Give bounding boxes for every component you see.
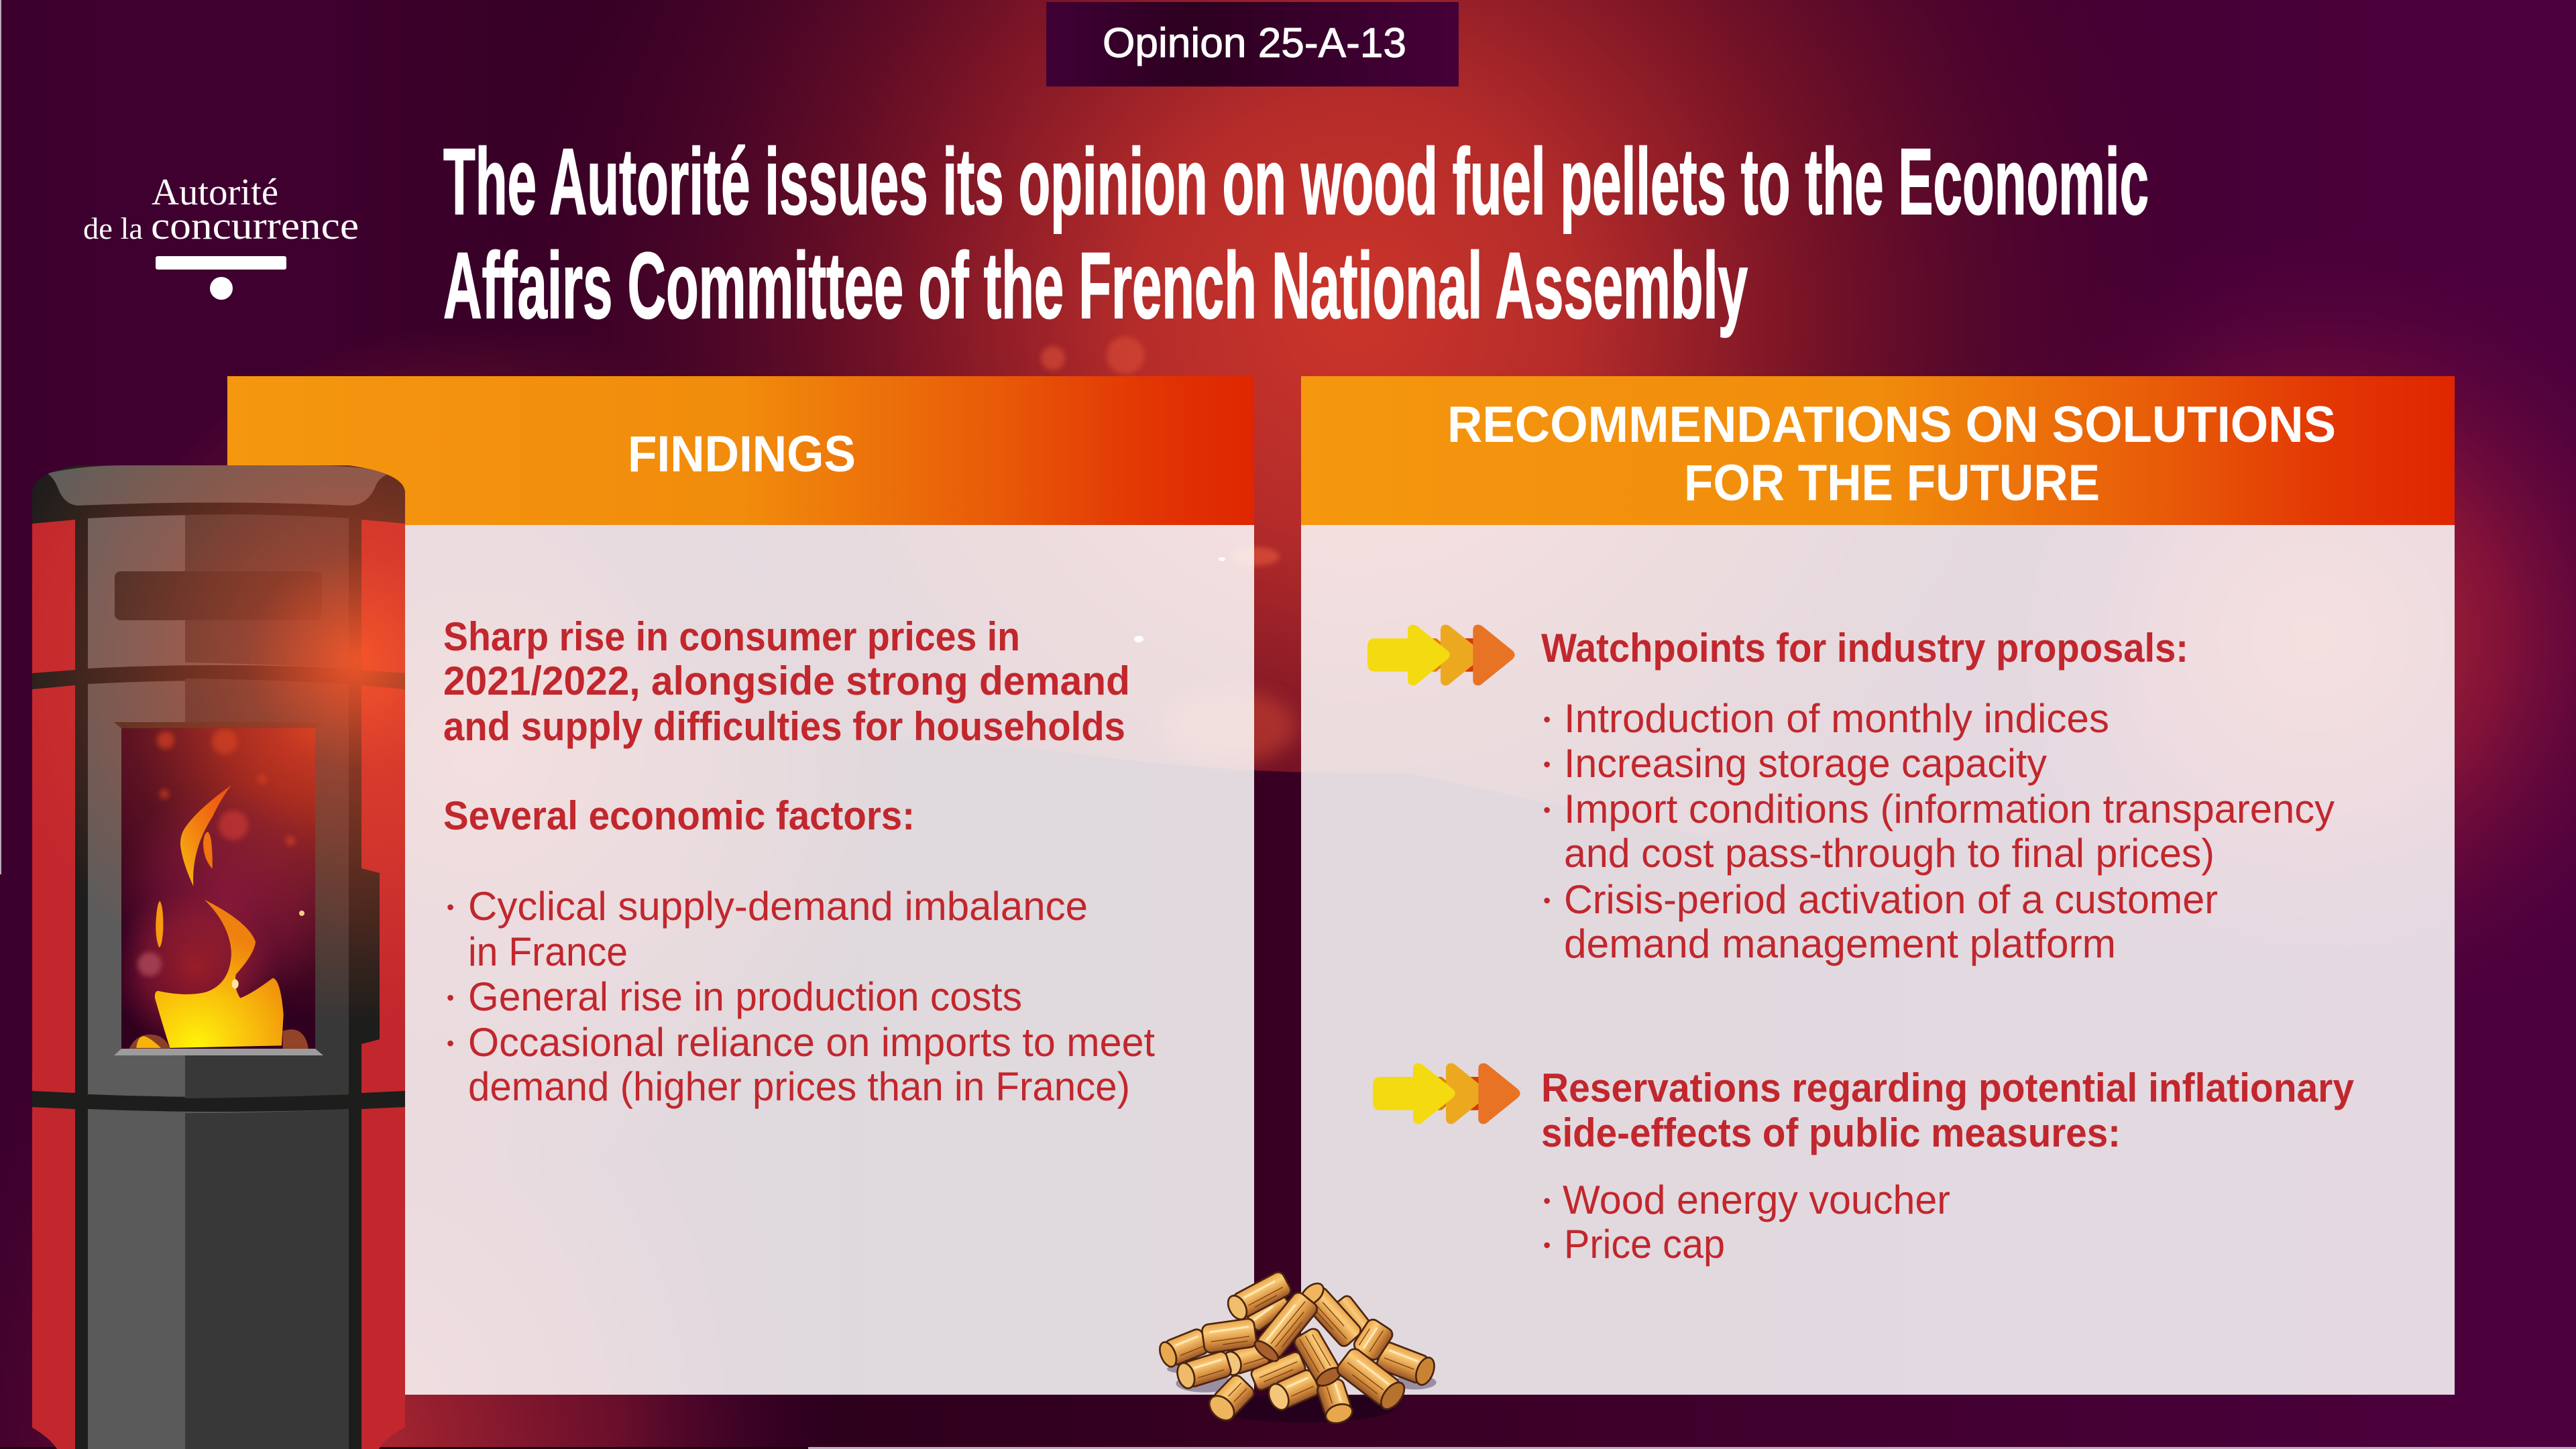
watchpoints list: demand management platform [1564,921,2116,966]
reservations list: • [1543,1189,1551,1213]
firebox [114,722,323,1055]
stove illustration [32,465,405,1449]
findings body [227,525,1254,1395]
pellet pile [1157,1270,1438,1426]
economic factors list: General rise in production costs [468,974,1022,1019]
reservations heading: Reservations regarding potential inflationary [1541,1065,2355,1110]
opinion tag: Opinion 25-A-13 [1103,20,1406,66]
economic factors list: in France [468,929,628,974]
icon: arrows watchpoints [1367,625,1515,685]
embers [137,729,304,976]
findings lead text: and supply difficulties for households [443,704,1125,749]
reservations list: Wood energy voucher [1563,1177,1950,1222]
recommendations header [1301,376,2455,525]
recommendations heading: RECOMMENDATIONS ON SOLUTIONS [1447,396,2336,453]
economic factors list: Cyclical supply-demand imbalance [468,884,1088,929]
recommendations heading [1447,396,2336,512]
recommendations heading: FOR THE FUTURE [1684,455,2100,512]
opinion tag [1046,2,1459,86]
panel: recommendations [1301,376,2455,1395]
logo: Autorité de la concurrence [83,172,359,300]
watchpoints list: Introduction of monthly indices [1564,696,2109,741]
economic factors list: • [447,986,454,1010]
pellet shadows [1167,1365,1437,1423]
icon: arrows reservations [1373,1063,1520,1124]
recommendations body [1301,525,2455,1395]
economic factors list: • [447,1031,454,1055]
reservations heading: side-effects of public measures: [1541,1110,2121,1155]
panel: findings [227,376,1254,1395]
logo: Autorité de la concurrence: Autorité [152,172,278,213]
findings header [227,376,1254,525]
watchpoints list: Import conditions (information transparency [1564,787,2335,831]
reservations heading [1541,1065,2355,1155]
stove shell panels [32,465,405,1449]
reservations list: Price cap [1564,1222,1725,1267]
findings heading: FINDINGS [628,426,856,483]
reservations list [1543,1177,1950,1267]
glow over stove [32,465,405,1003]
watchpoints list: • [1543,707,1551,732]
flames [129,785,309,1049]
findings lead text: 2021/2022, alongside strong demand [443,658,1130,703]
title [443,129,2149,338]
watchpoints list: • [1543,798,1551,822]
wood pellets [1157,1270,1438,1426]
economic factors list: Occasional reliance on imports to meet [468,1020,1155,1065]
watchpoints list: and cost pass-through to final prices) [1564,831,2215,876]
economic factors list [447,884,1155,1109]
economic factors list: demand (higher prices than in France) [468,1064,1130,1109]
watchpoints heading: Watchpoints for industry proposals: [1541,626,2188,671]
logo: Autorité de la concurrence: de la [83,211,143,245]
findings lead text [443,614,1130,749]
stove roof [47,465,390,506]
watchpoints list: • [1543,752,1551,776]
reservations list: • [1543,1233,1551,1257]
watchpoints list: Crisis-period activation of a customer [1564,877,2218,922]
stove display [115,571,322,620]
findings lead text: Sharp rise in consumer prices in [443,614,1020,659]
watchpoints list [1543,696,2335,966]
economic factors subheading: Several economic factors: [443,793,915,838]
logo: Autorité de la concurrence: concurrence [151,204,359,247]
watchpoints list: • [1543,888,1551,913]
economic factors list: • [447,895,454,919]
watchpoints list: Increasing storage capacity [1564,741,2047,786]
